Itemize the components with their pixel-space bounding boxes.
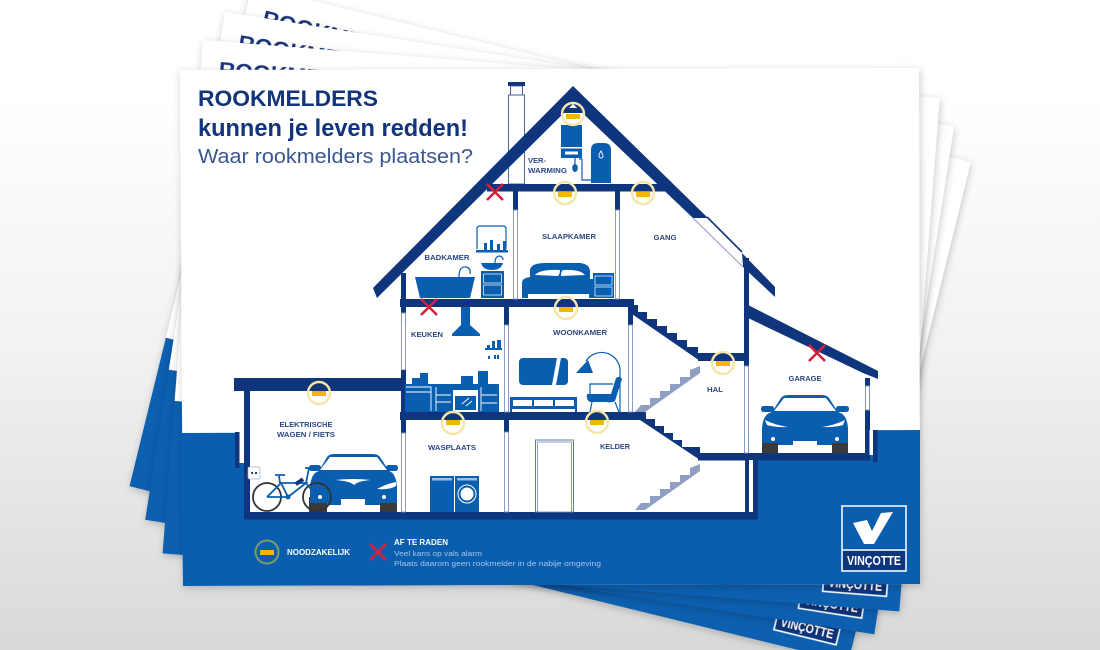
stacked card 1: ROOKMELDERS (218, 57, 399, 96)
label: garage: GARAGE (788, 374, 822, 383)
label: badkamer: BADKAMER (424, 253, 470, 262)
label: keuken: KEUKEN (411, 330, 443, 339)
label: elektrische: ELEKTRISCHE (280, 420, 332, 429)
icon: water tank (591, 143, 611, 183)
chimney (508, 82, 525, 184)
icon: kitchen shelf (485, 340, 502, 359)
label: warming: WARMING (528, 166, 567, 175)
label: wagen fiets: WAGEN / FIETS (277, 430, 335, 439)
legend (256, 538, 601, 568)
blue ground band (181, 430, 920, 586)
icon: television (519, 358, 568, 385)
title (198, 86, 473, 168)
attic tie bar (563, 108, 583, 113)
title: Waar rookmelders plaatsen? (198, 145, 473, 168)
stairs grey (635, 366, 700, 412)
icon: garage car (761, 395, 849, 453)
door (536, 440, 574, 512)
icon: electric car (309, 454, 398, 512)
icon: washer and dryer (430, 476, 479, 512)
annex roof and wall (234, 378, 404, 391)
stacked card 2: ROOKMELDERS (236, 31, 418, 83)
legend text: discouraged: Plaats daarom geen rookmelder in de nabije omgeving (394, 559, 601, 568)
room labels (277, 156, 822, 452)
legend icon: discouraged (370, 544, 386, 560)
label: kelder: KELDER (600, 442, 630, 451)
title: ROOKMELDERS (198, 86, 378, 111)
floors (487, 184, 665, 192)
icon: sink and mirror (476, 226, 508, 298)
icon: kitchen units (405, 371, 499, 412)
icon: extractor hood (452, 307, 480, 336)
icon: boiler (561, 125, 591, 180)
stacked card 2: VINÇOTTE (804, 593, 859, 615)
legend text: discouraged (394, 538, 601, 568)
stacked card 2 (145, 12, 954, 634)
label: woonkamer: WOONKAMER (553, 328, 608, 337)
label: slaapkamer: SLAAPKAMER (542, 232, 597, 241)
icon: sideboard (510, 397, 577, 412)
card paper (180, 68, 920, 586)
logo: Vinçotte (842, 506, 906, 571)
basement right wall (745, 460, 749, 512)
title: kunnen je leven redden! (198, 115, 468, 142)
legend icon: necessary (256, 540, 278, 564)
main roof (373, 86, 708, 298)
front card (180, 68, 920, 586)
discouraged markers (421, 184, 825, 361)
stacked card 3: VINÇOTTE (779, 615, 835, 642)
icon: floor lamp (576, 352, 620, 412)
label: hal: HAL (707, 385, 723, 394)
icon: bed (522, 263, 614, 298)
icon: bicycle (253, 468, 331, 511)
stacked card 3: ROOKMELDERS (260, 6, 441, 73)
stacked card 1: VINÇOTTE (828, 576, 883, 594)
legend text: discouraged: AF TE RADEN (394, 538, 448, 547)
interior below ground (250, 428, 746, 513)
smoke detectors (308, 103, 734, 434)
stairs dark (630, 299, 700, 361)
stacked card 3 (130, 0, 971, 650)
label: wasplaats: WASPLAATS (428, 443, 476, 452)
icon: bath (415, 267, 475, 298)
label: verwarming: VER- (528, 156, 546, 165)
stacked card 1 (163, 40, 940, 611)
icon: armchair (587, 377, 622, 412)
logo: Vinçotte: VINÇOTTE (847, 554, 901, 568)
legend label: necessary: NOODZAKELIJK (287, 548, 350, 557)
walls (401, 273, 406, 299)
garage roof and walls (748, 305, 878, 379)
icon: wall socket (248, 467, 260, 479)
house structure (234, 82, 878, 520)
legend text: discouraged: Veel kans op vals alarm (394, 549, 482, 558)
label: gang: GANG (654, 233, 677, 242)
